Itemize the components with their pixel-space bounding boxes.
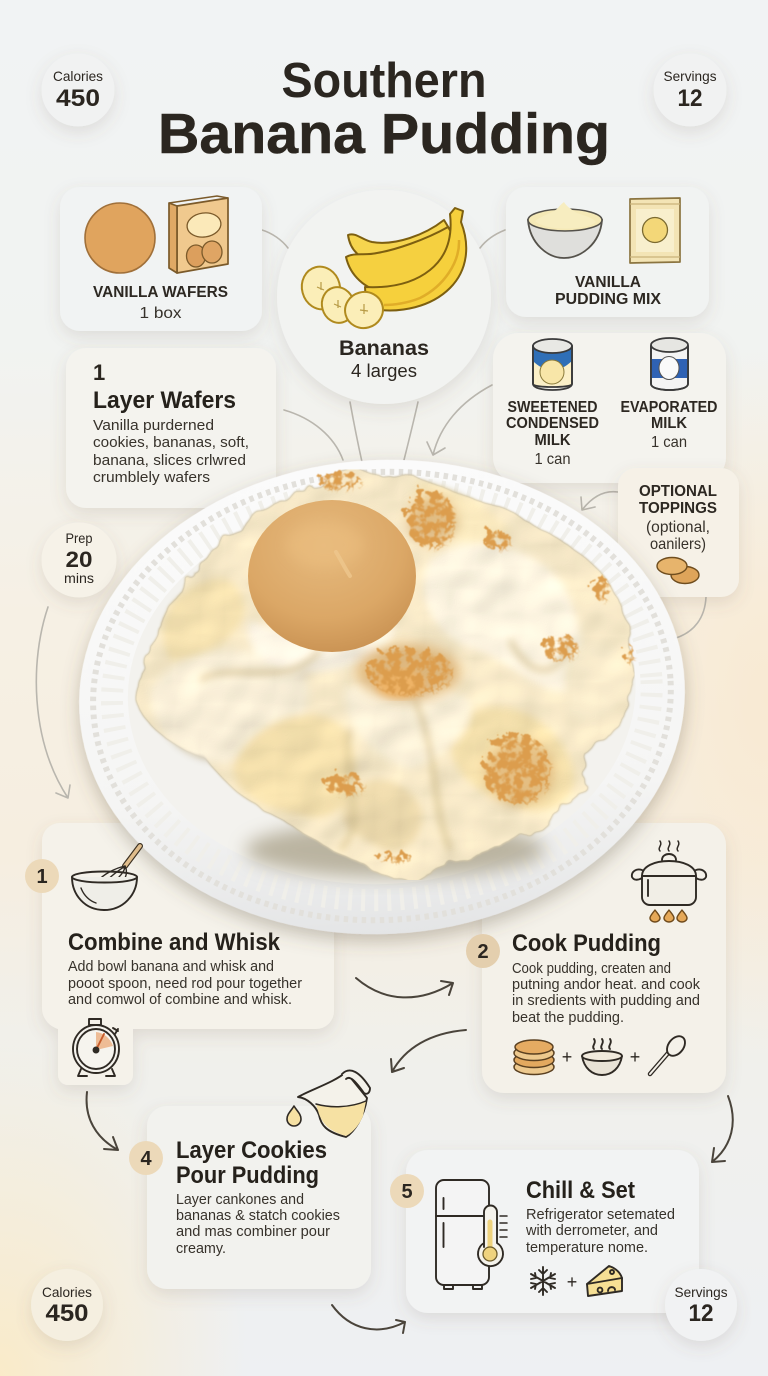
badge: number 5: [390, 1174, 424, 1208]
icon: evaporated milk can: [651, 338, 688, 390]
panel: step combine and whisk: and comwol of combine and whisk.: [68, 991, 292, 1008]
badge: number 4: 4: [140, 1148, 152, 1170]
badge: number 4: [129, 1141, 163, 1175]
badge: number 1: 1: [36, 866, 48, 888]
connector lines: [36, 230, 706, 798]
title: Southern: [282, 54, 486, 108]
photo: plate of banana pudding: [67, 444, 697, 950]
panel: step layer cookies pour pudding: and mas combiner pour: [176, 1223, 330, 1240]
stat badge: servings top: Servings: [664, 68, 716, 84]
stat badge: calories bottom: Calories: [42, 1284, 92, 1300]
panel: step layer cookies pour pudding: Pour Pudding: [176, 1162, 319, 1189]
pudding shadow: [245, 822, 545, 878]
panel: vanilla wafers: 1 box: [140, 305, 182, 322]
icon: whisk and bowl: [72, 846, 140, 910]
badge: number 2: [466, 934, 500, 968]
plate: [67, 444, 697, 950]
stat badge: servings top: 12: [678, 85, 702, 112]
panel: step layer cookies pour pudding: bananas & statch cookies: [176, 1207, 340, 1224]
icon: pitcher pouring: [287, 1070, 370, 1137]
panel: milks: SWEETENED: [508, 399, 598, 416]
panel: step cook pudding: Cook Pudding: [512, 930, 661, 957]
stat badge: calories bottom: 450: [46, 1300, 88, 1327]
panel: step cook pudding: +: [630, 1047, 640, 1067]
icon: snowflake: [531, 1267, 555, 1295]
panel: step combine and whisk: Add bowl banana and whisk and: [68, 958, 274, 975]
panel: step 1 layer wafers: Vanilla purderned: [93, 417, 214, 434]
panel: step 1 layer wafers: [66, 348, 276, 508]
panel: step 1 layer wafers: cookies, bananas, soft,: [93, 434, 249, 451]
panel: vanilla pudding mix: VANILLA: [575, 274, 641, 291]
icon: spoon: [650, 1033, 689, 1074]
panel: step cook pudding: +: [562, 1047, 572, 1067]
panel: step chill and set: Chill & Set: [526, 1177, 635, 1204]
panel: milks: MILK: [651, 415, 688, 432]
panel: step layer cookies pour pudding: Layer cankones and: [176, 1191, 304, 1208]
panel: step cook pudding: beat the pudding.: [512, 1009, 624, 1026]
panel: step 1 layer wafers: Layer Wafers: [93, 387, 236, 414]
cream and banana folds: [150, 480, 626, 851]
badge: number 1: [25, 859, 59, 893]
panel: vanilla wafers: VANILLA WAFERS: [93, 284, 228, 301]
panel: step cook pudding: putning andor heat. and cook: [512, 976, 700, 993]
panel: vanilla pudding mix: [506, 187, 709, 317]
icon: timer: [73, 1019, 119, 1076]
icon: cheese: [587, 1266, 622, 1296]
panel: optional toppings: (optional,: [646, 519, 710, 536]
panel: optional toppings: TOPPINGS: [639, 500, 717, 517]
stat badge: calories bottom: [31, 1269, 103, 1341]
icon: steaming bowl: [582, 1039, 622, 1075]
panel: optional toppings: OPTIONAL: [639, 483, 717, 500]
icon: pot on burner: [632, 841, 706, 922]
pudding body with lumpy lighting: [135, 470, 634, 880]
pudding base: [135, 470, 634, 880]
icon: pudding bowl and packet: [528, 198, 680, 263]
panel: step layer cookies pour pudding: Layer Cookies: [176, 1137, 327, 1164]
title: [158, 54, 610, 166]
panel: step chill and set: +: [567, 1272, 577, 1292]
stat badge: prep time: [42, 522, 116, 598]
stat badge: servings top: [654, 54, 726, 126]
panel: step cook pudding: Cook pudding, createn and: [512, 960, 671, 977]
panel: milks: CONDENSED: [506, 415, 599, 432]
icon: condensed milk can: [533, 339, 572, 390]
icon: fridge with thermometer: [436, 1180, 507, 1289]
icon: wafer and box: [85, 196, 228, 273]
badge: number 5: 5: [401, 1181, 413, 1203]
panel: step chill and set: Refrigerator setemated: [526, 1206, 675, 1223]
panel: milks: 1 can: [534, 451, 570, 468]
title: Banana Pudding: [158, 102, 610, 166]
panel: step chill and set: with derrometer, and: [525, 1222, 658, 1239]
icon: pancake stack: [514, 1040, 554, 1074]
stat badge: calories top: Calories: [53, 68, 103, 84]
panel: milks: [493, 333, 726, 483]
panel: step chill and set: temperature nome.: [526, 1239, 648, 1256]
wafer cookie: [248, 500, 416, 652]
panel: step combine and whisk: [25, 823, 334, 1085]
panel: milks: MILK: [534, 432, 571, 449]
panel: bananas: Bananas: [339, 337, 429, 360]
stat badge: prep time: mins: [64, 570, 94, 586]
panel: step combine and whisk: pooot spoon, need rod pour together: [68, 975, 302, 992]
panel: milks: EVAPORATED: [620, 399, 718, 416]
panel: milks: 1 can: [651, 434, 687, 451]
panel: step cook pudding: [482, 823, 726, 1093]
panel: bananas: 4 larges: [351, 361, 417, 381]
panel: step 1 layer wafers: 1: [93, 360, 105, 385]
panel: step cook pudding: in sredients with pudding and: [512, 992, 700, 1009]
panel: step layer cookies pour pudding: [147, 1106, 371, 1289]
panel: optional toppings: oanilers): [650, 536, 706, 553]
stat badge: servings bottom: Servings: [674, 1284, 728, 1300]
panel: step 1 layer wafers: crumblely wafers: [93, 469, 210, 486]
panel: vanilla wafers: [60, 187, 262, 331]
icon: banana bunch and slices: [297, 208, 466, 332]
panel: step chill and set: [406, 1150, 699, 1313]
stat badge: calories top: [42, 54, 114, 126]
wafer crumbs: [318, 473, 635, 863]
panel: step 1 layer wafers: banana, slices crlwred: [93, 452, 246, 469]
panel: step combine and whisk: Combine and Whisk: [68, 929, 281, 956]
icon: wafer coins: [657, 558, 699, 584]
stat badge: prep time: Prep: [66, 531, 92, 546]
panel: optional toppings: [618, 468, 739, 597]
badge: number 2: 2: [477, 941, 489, 963]
stat badge: calories top: 450: [56, 85, 100, 112]
stat badge: servings bottom: [665, 1269, 737, 1341]
stat badge: prep time: 20: [66, 547, 92, 572]
panel: bananas: [277, 190, 491, 404]
panel: vanilla pudding mix: PUDDING MIX: [555, 291, 662, 308]
overlay icons on cards: [72, 841, 706, 1208]
stat badge: servings bottom: 12: [688, 1300, 714, 1327]
process arrows: [87, 978, 733, 1333]
panel: step layer cookies pour pudding: creamy.: [176, 1240, 226, 1257]
